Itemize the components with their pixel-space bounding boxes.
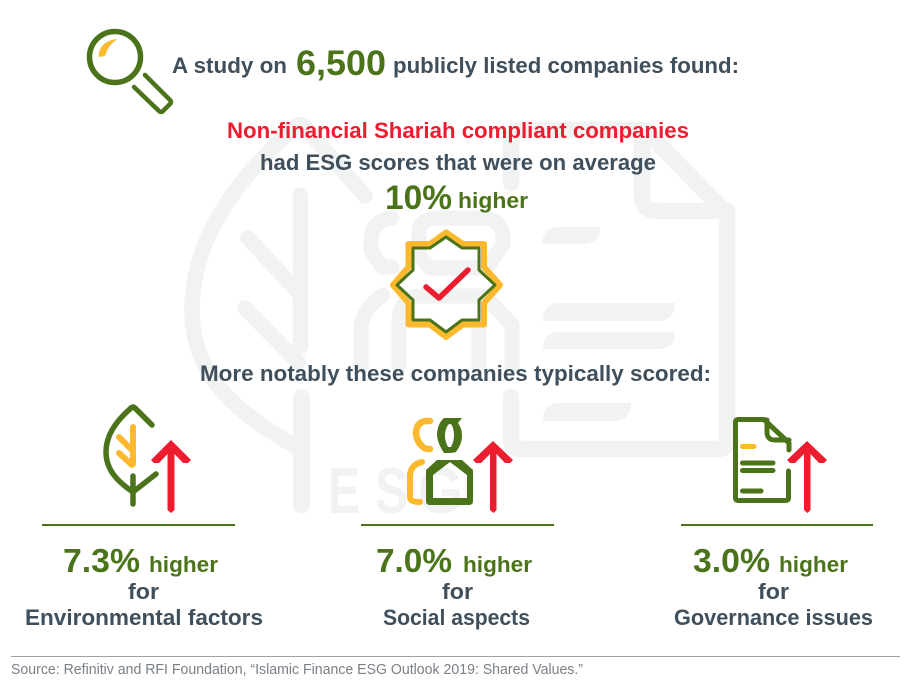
- panel: governance: [674, 420, 873, 630]
- text: environmental stat: [25, 542, 263, 630]
- text: governance stat: [674, 542, 873, 630]
- watermark: ESG lettering: G: [418, 454, 463, 527]
- text: key finding: had ESG scores that were on average: [260, 150, 656, 175]
- footer: source: Source: Refinitiv and RFI Foundation, “Islamic Finance ESG Outlook 2019: Shared Values.”: [11, 662, 583, 678]
- rule: [361, 524, 554, 526]
- panel: environmental: [25, 407, 263, 630]
- text: social stat: for: [442, 579, 473, 604]
- arrow: up: [787, 441, 827, 513]
- text: governance stat: higher: [779, 552, 848, 577]
- text: social stat: 7.0%: [376, 542, 452, 579]
- watermark: document: [511, 130, 727, 449]
- panel: social: [361, 418, 554, 630]
- icon: document: [736, 420, 789, 500]
- icon: star badge with check mark: [393, 232, 500, 337]
- text: key finding: [227, 118, 689, 217]
- text: environmental stat: higher: [149, 552, 218, 577]
- arrow: up: [151, 440, 191, 513]
- watermark: ESG lettering: S: [375, 454, 408, 527]
- text: governance stat: Governance issues: [674, 605, 873, 630]
- watermark: ESG lettering: [328, 454, 463, 527]
- watermark: person: [361, 218, 512, 366]
- heading: study intro: publicly listed companies found:: [393, 53, 739, 78]
- watermark: leaf: [192, 124, 365, 505]
- text: key finding: higher: [458, 188, 528, 213]
- icon: people: [410, 418, 473, 505]
- text: social stat: higher: [463, 552, 532, 577]
- icon: leaf: [106, 407, 156, 504]
- text: governance stat: for: [758, 579, 789, 604]
- rule: [681, 524, 873, 526]
- arrow: up: [473, 441, 513, 513]
- heading: study intro: 6,500: [296, 44, 386, 83]
- rule: [42, 524, 235, 526]
- text: environmental stat: Environmental factors: [25, 605, 263, 630]
- watermark: ESG icons: [192, 124, 727, 527]
- text: social stat: Social aspects: [383, 605, 530, 630]
- text: environmental stat: 7.3%: [63, 542, 140, 579]
- heading: study intro: [172, 44, 739, 83]
- watermark: document lines: [542, 227, 675, 421]
- watermark: ESG lettering: E: [328, 454, 360, 527]
- text: key finding: Non-financial Shariah compliant companies: [227, 118, 689, 143]
- text: social stat: [376, 542, 532, 630]
- heading: study intro: A study on: [172, 53, 287, 78]
- icon: magnifying glass: [90, 32, 171, 112]
- text: governance stat: 3.0%: [693, 542, 770, 579]
- text: environmental stat: for: [128, 579, 159, 604]
- subheading: More notably these companies typically scored:: [200, 361, 711, 386]
- text: key finding: 10%: [385, 179, 452, 217]
